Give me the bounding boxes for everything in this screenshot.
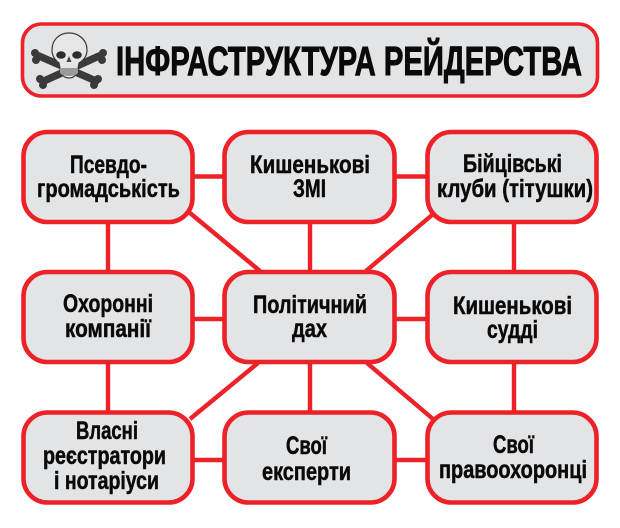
label: Кишенькові bbox=[250, 151, 370, 179]
node: Свої правоохоронці bbox=[428, 412, 596, 502]
label bbox=[253, 291, 367, 343]
label: судді bbox=[487, 316, 538, 344]
label bbox=[453, 292, 572, 344]
label: Псевдо- bbox=[70, 151, 147, 179]
node: Псевдо-громадськість bbox=[24, 132, 192, 222]
label bbox=[437, 150, 593, 203]
label: Свої bbox=[286, 432, 328, 460]
label: компанії bbox=[65, 315, 152, 343]
title banner bbox=[22, 24, 598, 96]
label: Кишенькові bbox=[453, 292, 572, 320]
label bbox=[439, 431, 587, 484]
label: і нотаріуси bbox=[54, 467, 159, 495]
node: Бійцівські клуби (тітушки) bbox=[428, 132, 596, 222]
node: Кишенькові судді bbox=[428, 272, 596, 362]
label bbox=[37, 151, 180, 203]
node: Свої експерти bbox=[224, 412, 394, 502]
label: правоохоронці bbox=[439, 456, 587, 484]
label: Свої bbox=[493, 431, 535, 459]
label bbox=[262, 432, 351, 486]
label: реєстратори bbox=[43, 442, 166, 470]
icon: skull and crossbones bbox=[31, 33, 107, 89]
node: Кишенькові ЗМІ bbox=[224, 132, 394, 222]
label: громадськість bbox=[37, 175, 180, 203]
label: ЗМІ bbox=[293, 175, 326, 203]
label: Політичний bbox=[253, 291, 367, 319]
label: дах bbox=[292, 315, 327, 343]
connector lines bbox=[108, 176, 514, 460]
node: Політичний дах bbox=[224, 272, 394, 362]
node: Власні реєстратори і нотаріуси bbox=[24, 412, 192, 502]
label: експерти bbox=[262, 458, 351, 486]
label: Бійцівські bbox=[463, 150, 562, 178]
label bbox=[43, 417, 166, 495]
banner background bbox=[22, 24, 598, 96]
label bbox=[63, 290, 153, 343]
label: Охоронні bbox=[63, 290, 153, 318]
label: Власні bbox=[76, 417, 138, 445]
label bbox=[250, 151, 370, 203]
node: Охоронні компанії bbox=[24, 272, 192, 362]
